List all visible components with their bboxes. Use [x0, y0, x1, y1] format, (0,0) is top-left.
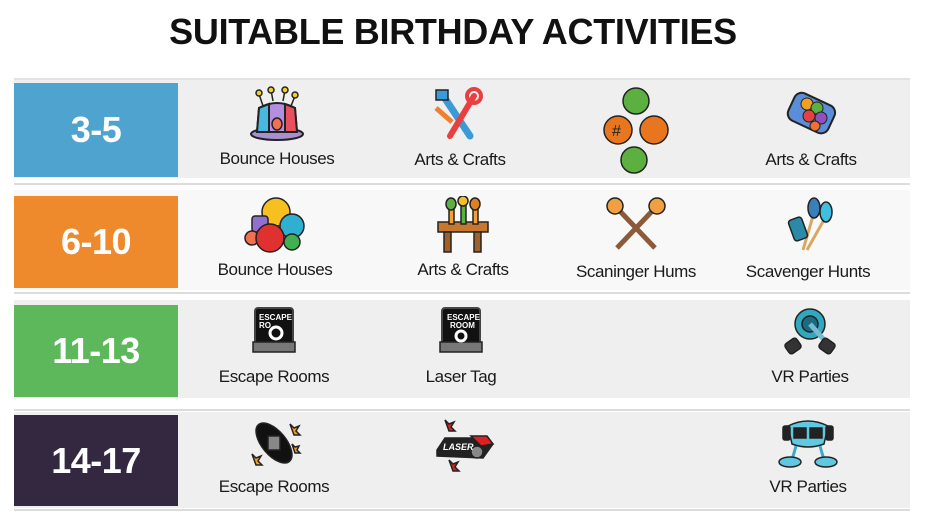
item: escape rooms row3: ESCAPE: [259, 313, 293, 322]
item: arts & crafts row1 col4: [765, 92, 857, 169]
item: bounce houses row1: Bounce Houses: [220, 149, 334, 168]
age box 6-10: 6-10: [61, 221, 131, 262]
icon: laser row4: LASER: [443, 442, 474, 452]
age box 14-17: 14-17: [51, 440, 141, 480]
item: scaninger hums: Scaninger Hums: [576, 262, 696, 281]
age box 3-5: 3-5: [71, 109, 121, 150]
item: bounce houses row2: Bounce Houses: [218, 260, 332, 279]
item: arts & crafts row1: [414, 87, 506, 169]
item: escape rooms row4: Escape Rooms: [219, 477, 329, 496]
item: arts & crafts row1: Arts & Crafts: [414, 150, 506, 169]
item: scavenger hunts: [746, 197, 870, 281]
item: scaninger hums: [576, 197, 696, 281]
row band 1: [14, 80, 910, 178]
icon: laser row4: [436, 420, 494, 472]
age box 3-5: [14, 83, 178, 177]
title: SUITABLE BIRTHDAY ACTIVITIES: [169, 11, 737, 52]
age box 6-10: [14, 196, 178, 288]
item: escape rooms row3: [219, 307, 329, 386]
item: laser tag row3: Laser Tag: [426, 367, 496, 386]
item: arts & crafts row1 col4: Arts & Crafts: [765, 150, 857, 169]
item: escape rooms row3: Escape Rooms: [219, 367, 329, 386]
age box 14-17: [14, 415, 178, 506]
icon: craft buttons row1: [603, 87, 669, 174]
item: scavenger hunts: Scavenger Hunts: [746, 262, 870, 281]
row band 4: [14, 412, 910, 508]
item: bounce houses row2: [218, 197, 332, 279]
item: arts & crafts row2: Arts & Crafts: [417, 260, 509, 279]
item: laser tag row3: ESCAPE: [447, 313, 481, 322]
row band 2: [14, 190, 910, 290]
icon: craft buttons row1: #: [612, 123, 621, 140]
age box 11-13: 11-13: [52, 330, 140, 371]
item: arts & crafts row2: [417, 196, 509, 279]
item: laser tag row3: ROOM: [450, 321, 475, 330]
item: vr parties row3: VR Parties: [771, 367, 849, 386]
item: escape rooms row4: [219, 422, 329, 496]
item: vr parties row4: VR Parties: [769, 477, 847, 496]
row band 3: [14, 300, 910, 398]
item: vr parties row4: [769, 420, 847, 496]
item: vr parties row3: [771, 308, 849, 386]
age box 11-13: [14, 305, 178, 397]
item: bounce houses row1: [220, 86, 334, 168]
item: escape rooms row3: RO: [259, 321, 271, 330]
item: laser tag row3: [426, 307, 496, 386]
